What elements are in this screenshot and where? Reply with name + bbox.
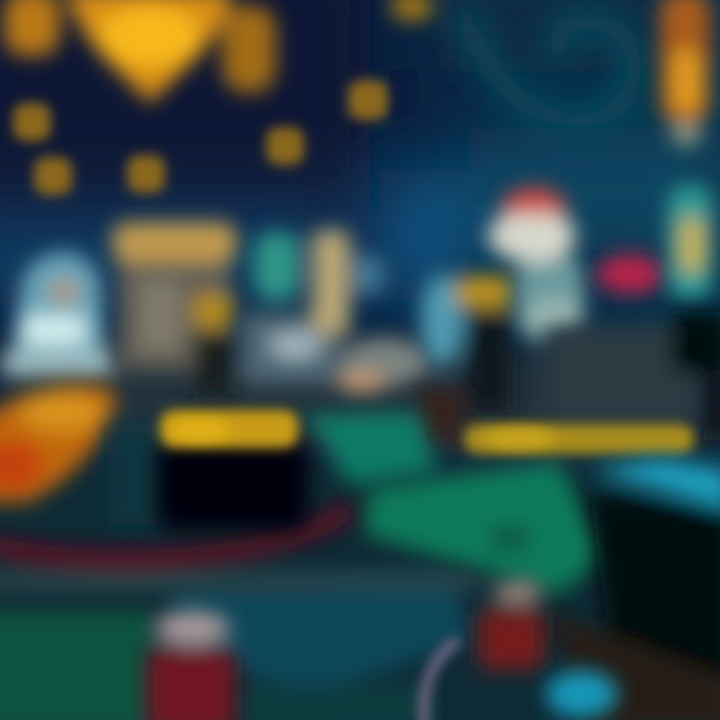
table: long gold counter at right	[464, 424, 694, 454]
building: white tower with red dome	[488, 187, 584, 340]
floor: red carpet arc	[0, 510, 480, 582]
building: black tower with gold cap	[418, 274, 512, 444]
skyline: mid-ground dark band	[0, 345, 720, 460]
chandelier: golden lantern at top left	[4, 0, 434, 104]
table: orange glowing slot machine at left	[0, 385, 116, 502]
table: dark counter with gold top	[158, 410, 308, 530]
decoration: swirl at top right	[460, 10, 635, 120]
building: teal and cream towers	[240, 230, 429, 393]
pillar: dark teal post	[108, 425, 158, 525]
building: pale blue dome at left	[0, 252, 115, 376]
floor: teal green table areas	[0, 412, 720, 720]
cup: red cup at bottom left	[147, 611, 235, 720]
cup: red cup at bottom center	[478, 581, 544, 670]
building: pink sign	[596, 254, 664, 294]
lanterns: small floating lights	[13, 80, 388, 195]
table: bright cyan counter at lower right	[550, 458, 720, 720]
decoration: purple curve at bottom	[424, 640, 458, 720]
building: dark block at far right	[545, 312, 720, 440]
lantern: orange tower light at top right	[660, 0, 710, 146]
puddle: cyan glow at bottom	[546, 670, 618, 718]
building: tan hotel tower	[112, 222, 237, 394]
building: striped tower at right	[668, 185, 712, 300]
glow: sky tones	[0, 0, 720, 305]
